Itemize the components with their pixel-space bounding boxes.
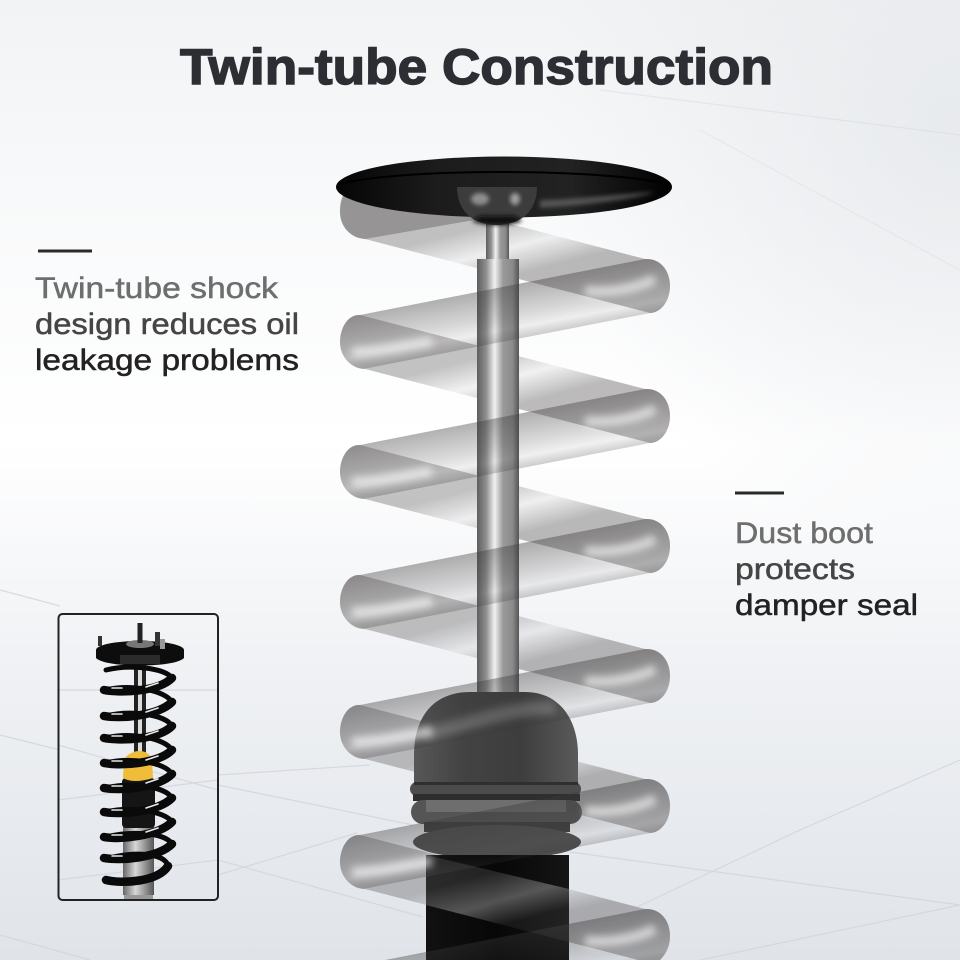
piston rod — [477, 222, 519, 699]
inset rod and damper — [122, 668, 155, 899]
inset: product photo — [58, 614, 218, 900]
back coil bands — [340, 185, 670, 960]
black lower tube — [426, 855, 569, 960]
top mount plate — [336, 156, 672, 225]
right callout: Dust boot — [735, 517, 874, 550]
left callout: leakage problems — [35, 344, 299, 377]
inset coil spring — [104, 667, 172, 882]
coil end highlights — [352, 279, 655, 942]
right callout: protects — [735, 553, 855, 586]
right callout — [735, 492, 918, 622]
left callout — [35, 250, 299, 377]
shock absorber cutaway illustration — [336, 156, 672, 960]
title: Twin-tube Construction — [180, 39, 773, 95]
front coil bands — [340, 259, 670, 960]
left callout: Twin-tube shock — [35, 272, 279, 305]
left callout: design reduces oil — [35, 308, 299, 341]
right callout: damper seal — [735, 589, 918, 622]
dust boot — [410, 692, 582, 859]
inset mount plate — [96, 623, 184, 666]
